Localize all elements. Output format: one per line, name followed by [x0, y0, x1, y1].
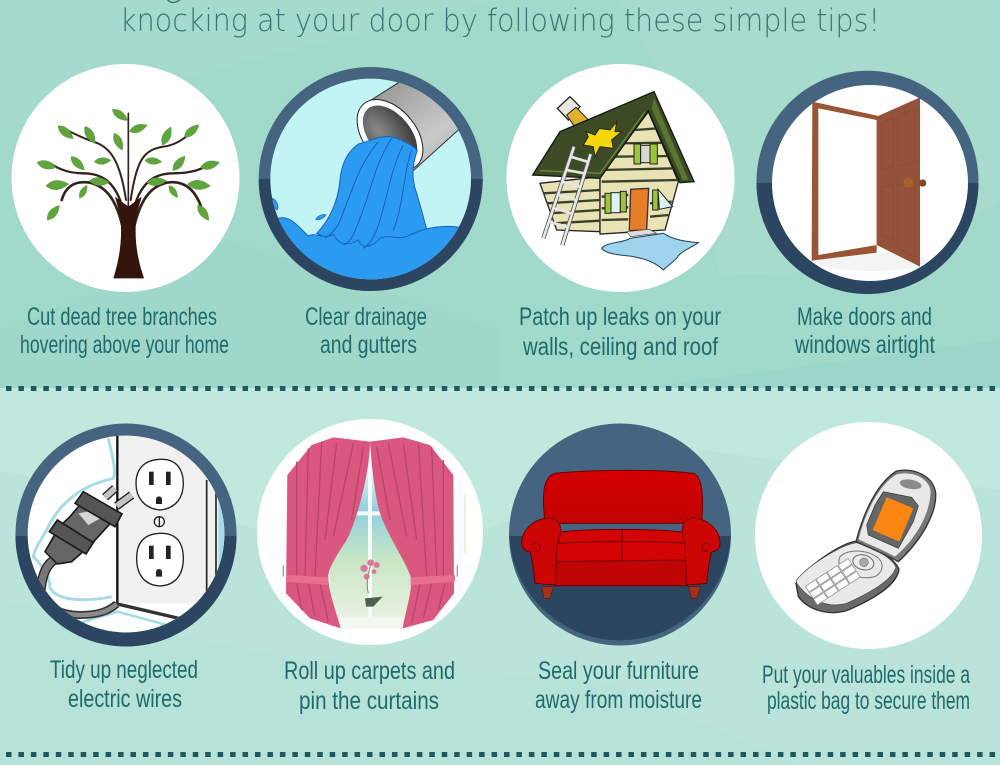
caption: Make doors and — [797, 303, 932, 331]
panel: roll up carpets — [257, 419, 483, 715]
caption — [20, 303, 229, 359]
caption — [535, 657, 702, 714]
icon: pink curtains in white circle — [257, 419, 483, 645]
panel: patch leaks — [506, 64, 734, 361]
caption: pin the curtains — [299, 687, 439, 715]
heading: knocking at your door by following these simple tips! — [120, 3, 880, 39]
panel: protect valuables — [755, 422, 982, 715]
caption — [762, 661, 970, 715]
caption: Cut dead tree branches — [27, 303, 217, 331]
caption — [50, 656, 198, 713]
caption: and gutters — [320, 331, 417, 359]
caption: electric wires — [68, 685, 182, 713]
caption: Patch up leaks on your — [519, 303, 721, 331]
icon: red sofa on dark circle — [509, 424, 731, 646]
icon: open door in ring — [756, 71, 978, 294]
caption — [519, 303, 721, 361]
panel: airtight doors — [756, 71, 978, 359]
caption: away from moisture — [535, 686, 702, 714]
icon: tree in white circle — [12, 64, 240, 292]
caption — [794, 303, 935, 359]
icon: pipe pouring water in ring — [259, 67, 483, 300]
caption: Tidy up neglected — [50, 656, 198, 684]
icon: damaged house in white circle — [506, 64, 734, 292]
caption: Clear drainage — [305, 303, 427, 331]
panel: cut tree branches — [12, 64, 240, 359]
caption — [305, 303, 427, 359]
icon: flip phone in white circle — [755, 422, 982, 649]
background: lower section — [0, 388, 1000, 765]
caption: windows airtight — [794, 331, 935, 359]
panel: tidy electric wires — [16, 424, 236, 713]
caption: Roll up carpets and — [284, 657, 455, 685]
caption: walls, ceiling and roof — [522, 333, 718, 361]
panel: clear drainage — [259, 67, 483, 359]
caption: Seal your furniture — [538, 657, 699, 685]
divider: lower dotted line — [6, 752, 1000, 757]
background: upper section — [0, 0, 1000, 388]
divider: upper dotted line — [6, 386, 1000, 391]
icon: plug and outlet in ring — [16, 424, 236, 647]
panel: seal furniture — [509, 424, 731, 714]
caption — [284, 657, 455, 715]
caption: hovering above your home — [20, 331, 229, 359]
